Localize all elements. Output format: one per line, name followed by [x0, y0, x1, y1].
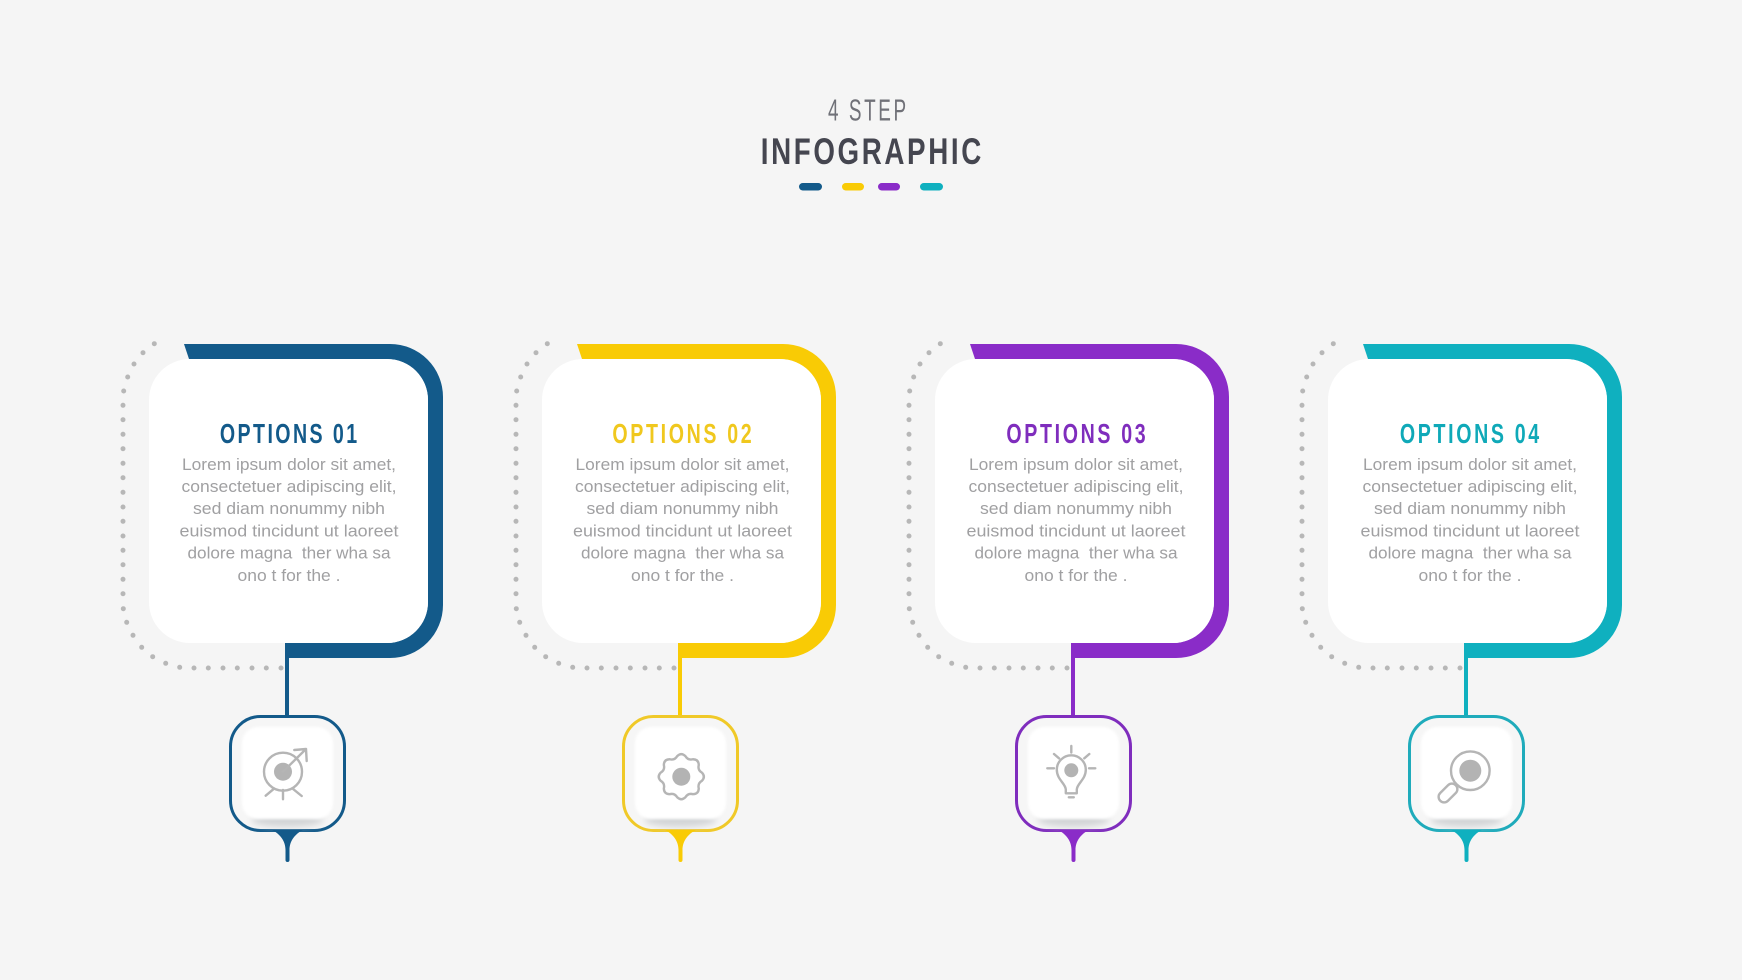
body text: ono t for the .	[631, 566, 734, 585]
body text: euismod tincidunt ut laoreet	[966, 522, 1186, 540]
body text: sed diam nonummy nibh	[586, 499, 778, 518]
body text: ono t for the .	[1418, 566, 1522, 585]
body text: consectetuer adipiscing elit,	[575, 477, 790, 496]
icon: magnifying glass	[1436, 751, 1490, 805]
icon: light bulb	[1047, 746, 1095, 797]
icon box	[624, 716, 738, 862]
white card	[935, 359, 1214, 643]
icon box	[230, 716, 344, 862]
title	[761, 94, 981, 190]
body text: euismod tincidunt ut laoreet	[1360, 522, 1580, 540]
body text	[1360, 455, 1580, 585]
body text	[180, 455, 399, 585]
body text: dolore magna ther wha sa	[974, 544, 1178, 562]
panel: options 03	[909, 344, 1229, 862]
body text: euismod tincidunt ut laoreet	[180, 522, 399, 540]
heading: OPTIONS 02	[612, 419, 752, 450]
panel: options 01	[123, 344, 443, 862]
white card	[149, 359, 428, 643]
body text: dolore magna ther wha sa	[188, 544, 391, 562]
colour band	[577, 344, 836, 716]
panel: options 04	[1302, 344, 1622, 862]
body text: consectetuer adipiscing elit,	[182, 477, 396, 496]
heading: OPTIONS 01	[220, 419, 357, 450]
body text: sed diam nonummy nibh	[1374, 499, 1566, 518]
heading: OPTIONS 03	[1006, 419, 1146, 450]
dotted outline	[909, 344, 1067, 668]
body text: Lorem ipsum dolor sit amet,	[1363, 455, 1577, 474]
white card	[542, 359, 821, 643]
body text: ono t for the .	[238, 566, 340, 585]
body text: Lorem ipsum dolor sit amet,	[576, 455, 790, 474]
body text: dolore magna ther wha sa	[581, 544, 785, 562]
body text	[966, 455, 1186, 585]
colour legend pills	[799, 183, 943, 190]
white card	[1328, 359, 1607, 643]
body text: sed diam nonummy nibh	[193, 499, 385, 518]
title line: INFOGRAPHIC: INFOGRAPHIC	[761, 130, 981, 172]
icon: gear	[659, 754, 704, 799]
dotted outline	[516, 344, 674, 668]
body text: consectetuer adipiscing elit,	[1362, 477, 1578, 496]
heading: OPTIONS 04	[1400, 419, 1540, 450]
body text: ono t for the .	[1024, 566, 1128, 585]
title line: 4 STEP: 4 STEP	[828, 94, 906, 128]
body text: consectetuer adipiscing elit,	[968, 477, 1184, 496]
body text: Lorem ipsum dolor sit amet,	[182, 455, 396, 474]
colour band	[1363, 344, 1622, 716]
icon: target with arrow	[264, 749, 307, 799]
body text: dolore magna ther wha sa	[1368, 544, 1572, 562]
panel: options 02	[516, 344, 836, 862]
dotted outline	[1302, 344, 1460, 668]
body text: euismod tincidunt ut laoreet	[573, 522, 792, 540]
body text	[573, 455, 792, 585]
colour band	[184, 344, 443, 716]
dotted outline	[123, 344, 281, 668]
body text: Lorem ipsum dolor sit amet,	[969, 455, 1183, 474]
icon box	[1016, 716, 1130, 862]
body text: sed diam nonummy nibh	[980, 499, 1172, 518]
icon box	[1410, 716, 1524, 862]
colour band	[970, 344, 1229, 716]
